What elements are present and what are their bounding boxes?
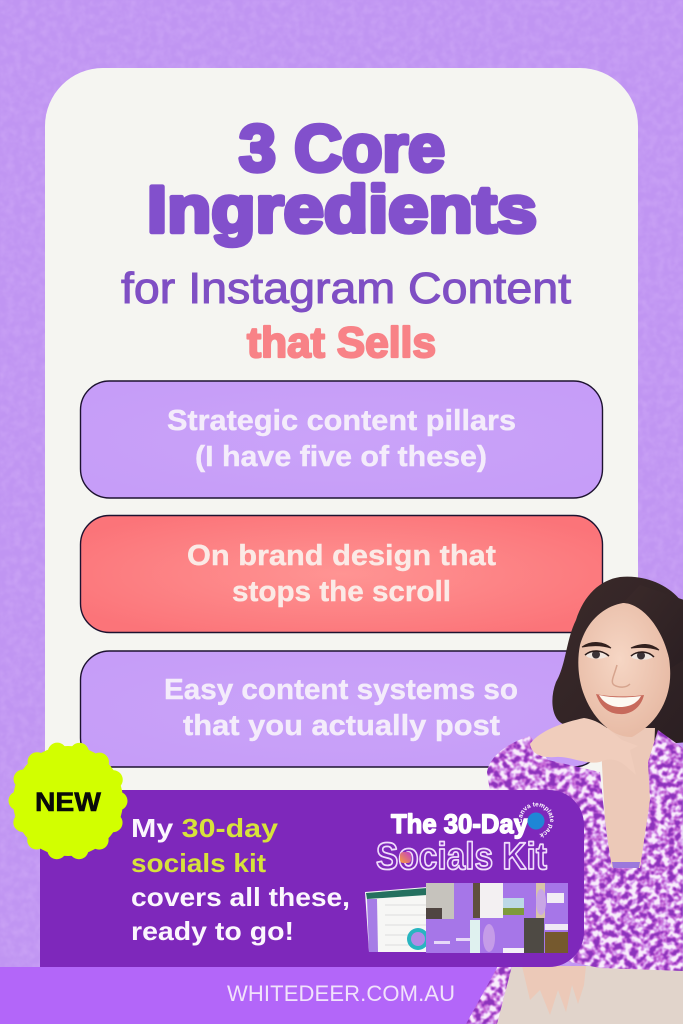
logo line two outlined: Socials Kit bbox=[376, 836, 547, 878]
text: pillar one bbox=[167, 405, 516, 473]
badge label: NEW bbox=[35, 787, 102, 817]
text: pillar three: Easy content systems so bbox=[164, 674, 518, 706]
panel: purple offer band bbox=[40, 790, 584, 967]
text: offer message: ready to go! bbox=[131, 916, 294, 946]
panel: main cream card bbox=[45, 68, 638, 828]
right eye bbox=[631, 652, 654, 660]
subheading: that Sells: that Sells bbox=[247, 319, 436, 367]
smile bbox=[596, 694, 644, 714]
text: offer message bbox=[131, 813, 350, 946]
product mockup: kit previews bbox=[365, 883, 568, 953]
sequin sleeve at bottom bbox=[466, 967, 512, 1024]
hand on chin bbox=[530, 718, 638, 775]
heading: 3 Core: 3 Core bbox=[239, 111, 445, 185]
text: pillar two bbox=[187, 540, 496, 608]
text: pillar three bbox=[164, 674, 518, 742]
text: offer message: socials kit bbox=[131, 848, 266, 878]
panel: on brand design bbox=[80, 516, 602, 632]
instagram-style icon bbox=[400, 852, 411, 863]
left eye bbox=[585, 650, 609, 659]
badge: NEW bbox=[13, 746, 123, 856]
text: offer message: My 30-day bbox=[131, 813, 279, 843]
top under jacket bbox=[612, 862, 640, 880]
canva seal: Canva template pack bbox=[518, 802, 554, 838]
subheading: for Instagram Content: for Instagram Content bbox=[121, 264, 571, 313]
hair back bbox=[552, 577, 683, 744]
face bbox=[578, 603, 670, 737]
template tiles bbox=[426, 883, 568, 953]
text: pillar three: that you actually post bbox=[183, 710, 500, 742]
nose bbox=[612, 665, 630, 687]
fingers at waist bbox=[522, 966, 586, 1015]
photo: smiling woman in sequin jacket bbox=[460, 577, 683, 1024]
hair parting strand bbox=[623, 585, 683, 668]
neck and chest bbox=[600, 728, 655, 875]
text: pillar two: On brand design that bbox=[187, 540, 496, 572]
heading: Ingredients: Ingredients bbox=[147, 172, 537, 246]
text: pillar one: (I have five of these) bbox=[195, 441, 487, 473]
right eyebrow bbox=[631, 644, 659, 650]
waist cream top bbox=[495, 966, 683, 1024]
spreadsheet preview bbox=[365, 887, 429, 952]
logo line one: The 30-Day bbox=[391, 809, 528, 839]
text: pillar two: stops the scroll bbox=[232, 576, 451, 608]
left eyebrow bbox=[582, 643, 611, 648]
logo: The 30-Day Socials Kit bbox=[376, 802, 554, 878]
footer strip bbox=[0, 967, 683, 1024]
footer url: WHITEDEER.COM.AU bbox=[227, 981, 455, 1006]
panel: easy content systems bbox=[80, 651, 602, 767]
text: offer message: covers all these, bbox=[131, 882, 350, 912]
panel: strategic content pillars bbox=[80, 381, 602, 498]
sequin jacket bbox=[480, 725, 683, 975]
title bbox=[121, 111, 571, 367]
text: pillar one: Strategic content pillars bbox=[167, 405, 516, 437]
